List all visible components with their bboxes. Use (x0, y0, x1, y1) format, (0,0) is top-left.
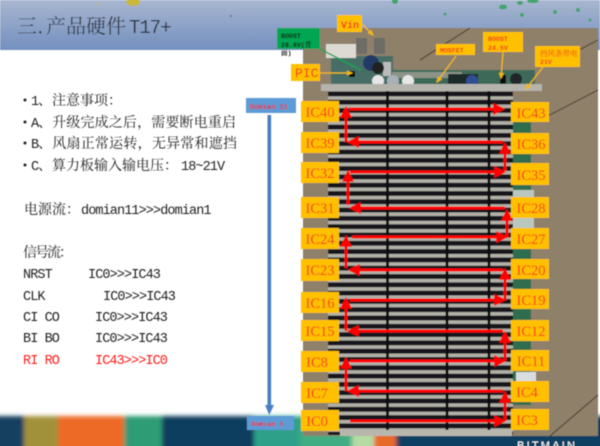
label: MOSFET: MOSFET (440, 48, 464, 54)
domain flow arrow (265, 115, 274, 415)
IC labels: right column: IC11 (517, 354, 545, 370)
power flow text (24, 199, 211, 219)
label: BOOST 24.5V (483, 32, 523, 52)
IC labels: left column: IC16 (306, 296, 334, 312)
notes list: C (31, 160, 39, 175)
label: BOOST 28.8V (277, 28, 320, 57)
photo: circuit board (326, 38, 535, 87)
label: Domain 11 (246, 98, 296, 113)
notes list (24, 90, 237, 175)
label arrow: BOOST 24.5V (501, 52, 503, 78)
signal flow table: IC43>>>IC0 (95, 354, 168, 369)
IC labels: left column: IC39 (306, 136, 334, 152)
label: fan strip voltage 21V: 21V (540, 59, 552, 66)
label: fan strip voltage 21V: 挡风条带电 (540, 48, 578, 59)
IC labels: left column: IC8 (306, 355, 328, 371)
notes list: 、注意事项： (38, 90, 122, 110)
label arrow: Vin (362, 24, 373, 35)
signal flow table: RI RO (23, 354, 60, 369)
label: MOSFET (436, 44, 475, 55)
label arrow: MOSFET (437, 56, 456, 82)
signal flow table: NRST (23, 268, 53, 283)
label arrow: fan strip voltage (526, 67, 543, 89)
label: BOOST 28.8V: BOOST (281, 33, 301, 40)
IC labels: right column: IC12 (516, 324, 546, 340)
IC labels: left column: IC24 (306, 232, 335, 248)
signal flow table: IC0>>>IC43 (103, 290, 176, 305)
IC labels: right column: IC35 (516, 168, 546, 184)
IC labels: left column (301, 101, 339, 431)
IC labels: right column: IC27 (516, 232, 546, 248)
signal flow table: CI CO (23, 311, 60, 326)
label: Domain 11: Domian 11 (250, 104, 288, 112)
IC labels: left column: IC31 (306, 201, 334, 217)
power flow text: domian11>>>domian1 (81, 204, 211, 219)
signal path arrows (346, 109, 507, 421)
footer band (0, 416, 600, 446)
label: BOOST 28.8V: 面) (281, 48, 292, 57)
label arrow: BOOST 28.8V (320, 49, 361, 70)
signal flow table: CLK (23, 290, 46, 305)
photo: heat sink with fins (321, 84, 542, 436)
notes list: 、升级完成之后，需要断电重启 (38, 112, 236, 132)
IC labels: left column: IC40 (306, 105, 334, 121)
signal flow table: 信号流： (23, 242, 73, 262)
IC labels: right column: IC4 (516, 385, 539, 401)
IC labels: left column: IC32 (306, 166, 334, 182)
label: PIC: PIC (295, 66, 319, 81)
notes list: 、算力板输入输电压： (38, 155, 178, 175)
IC labels: right column: IC43 (516, 106, 546, 122)
IC labels: left column: IC15 (306, 324, 334, 340)
signal flow table: IC0>>>IC43 (88, 268, 161, 283)
IC labels: left column: IC23 (306, 263, 334, 279)
power flow text: 电源流： (24, 199, 80, 219)
IC labels: right column: IC28 (516, 201, 546, 217)
label: BOOST 24.5V: 24.5V (488, 45, 508, 52)
label: BOOST 28.8V: 28.8V(背 (281, 40, 312, 49)
photo: wood background (303, 28, 598, 436)
notes list: B (31, 138, 39, 153)
label: Domain 1 (247, 416, 294, 430)
title: 产品硬件 (46, 10, 126, 39)
IC labels: left column: IC0 (306, 414, 328, 430)
signal flow table (23, 242, 176, 369)
header band (0, 0, 600, 50)
IC labels: right column (511, 102, 549, 430)
label: Vin (337, 15, 362, 32)
label: fan strip voltage 21V (535, 46, 580, 67)
signal flow table: IC0>>>IC43 (95, 332, 168, 347)
notes list: 、风扇正常运转，无异常和遮挡 (38, 133, 237, 153)
label: BOOST 24.5V: BOOST (488, 36, 508, 43)
IC labels: right column: IC19 (516, 293, 546, 309)
signal flow table: BI BO (23, 332, 60, 347)
IC labels: right column: IC20 (516, 263, 546, 279)
notes list: A (31, 117, 40, 132)
IC labels: right column: IC36 (516, 137, 546, 153)
label: Domain 1: Domian 1 (251, 421, 284, 429)
IC labels: right column: IC3 (516, 413, 538, 429)
label: Vin: Vin (341, 20, 359, 32)
signal flow table: IC0>>>IC43 (95, 311, 168, 326)
IC labels: left column: IC7 (306, 386, 328, 402)
notes list: 1 (31, 95, 39, 110)
notes list: 18~21V (181, 160, 226, 175)
title: T17+ (129, 17, 171, 39)
title: 三. (17, 10, 44, 39)
label arrow: PIC (320, 72, 352, 74)
